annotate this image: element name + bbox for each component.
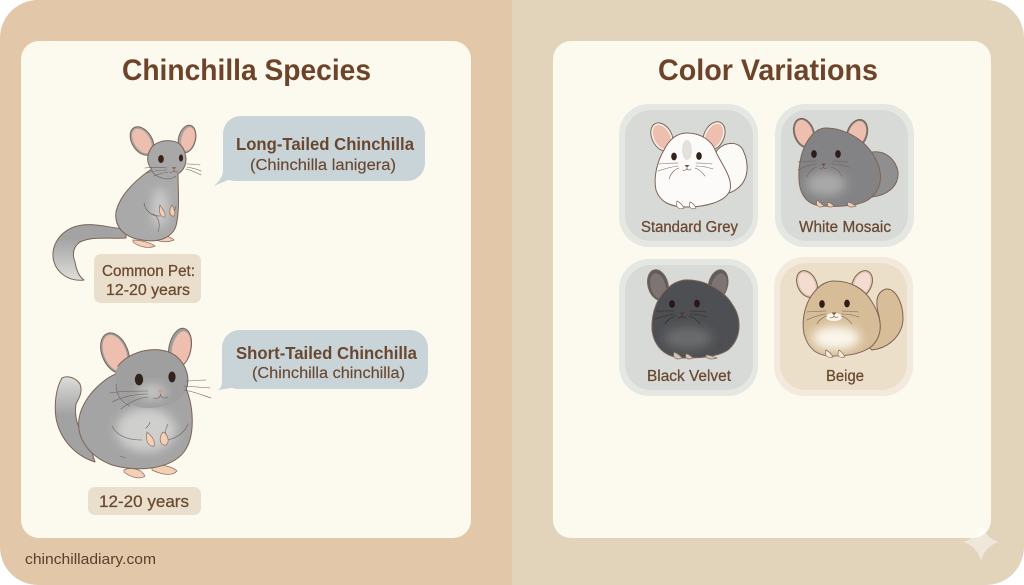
icon: sparkle — [963, 523, 999, 561]
card: standard grey — [619, 104, 758, 247]
label: short-tailed lifespan — [88, 487, 201, 515]
label: common pet lifespan: 12-20 years — [106, 282, 190, 299]
panel: chinchilla species — [21, 41, 471, 538]
callout: long-tailed chinchilla: (Chinchilla lanigera) — [250, 157, 396, 174]
card: beige — [774, 257, 913, 396]
callout: long-tailed chinchilla — [214, 116, 425, 186]
label: white mosaic: White Mosaic — [799, 219, 891, 236]
label: short-tailed lifespan: 12-20 years — [99, 492, 189, 511]
illustration: white chinchilla — [646, 118, 747, 209]
illustration: black chinchilla — [644, 267, 739, 359]
illustration: long-tailed chinchilla — [53, 123, 201, 280]
card: black velvet — [619, 259, 758, 396]
card: white mosaic — [775, 104, 914, 247]
illustration: beige chinchilla — [792, 267, 903, 357]
label: common pet lifespan — [94, 254, 201, 303]
label: common pet lifespan: Common Pet: — [102, 263, 195, 280]
illustration: short-tailed chinchilla — [55, 326, 211, 478]
heading: color variations: Color Variations — [658, 54, 878, 87]
illustration: grey chinchilla — [790, 116, 898, 207]
label: black velvet: Black Velvet — [647, 368, 732, 385]
callout: short-tailed chinchilla: Short-Tailed Chinchilla — [236, 343, 417, 363]
panel: color variations — [553, 41, 991, 538]
heading: chinchilla species: Chinchilla Species — [122, 54, 371, 87]
callout: short-tailed chinchilla — [218, 330, 428, 390]
callout: long-tailed chinchilla: Long-Tailed Chinchilla — [236, 134, 414, 154]
label: beige: Beige — [826, 368, 864, 385]
footer: website: chinchilladiary.com — [25, 551, 156, 568]
label: standard grey: Standard Grey — [641, 219, 738, 236]
callout: short-tailed chinchilla: (Chinchilla chinchilla) — [252, 365, 405, 382]
